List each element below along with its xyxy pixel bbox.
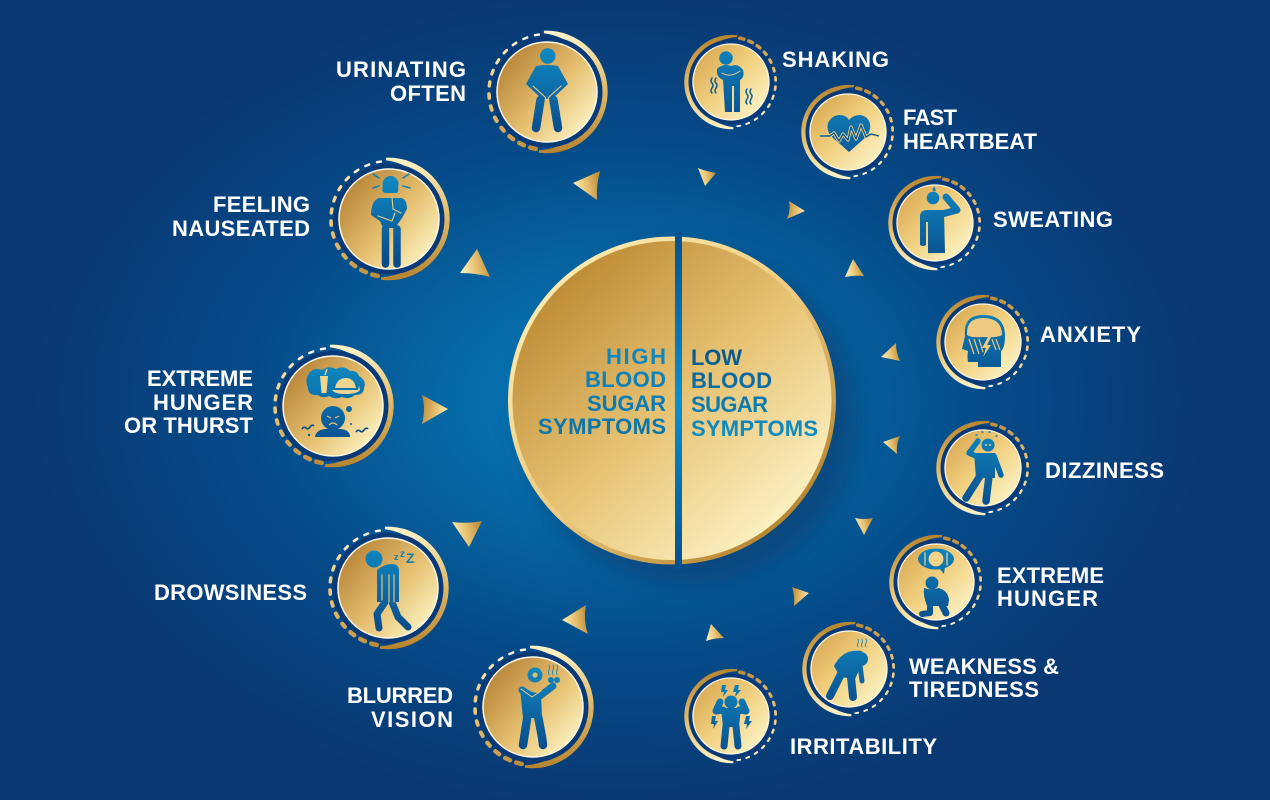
heading: low blood sugar symptoms: LOW — [691, 345, 742, 370]
badge: blurred vision — [475, 647, 592, 767]
label: blurred vision — [347, 683, 453, 732]
heading: high blood sugar symptoms: SYMPTOMS — [538, 414, 666, 439]
badge: shaking — [685, 36, 776, 128]
icon: head with storm — [962, 315, 1005, 367]
arrows: low blood sugar side — [698, 168, 900, 641]
badge: anxiety — [937, 296, 1028, 388]
label: urinating often — [336, 57, 466, 106]
icon: drowsy person — [366, 549, 415, 628]
badge: feeling nauseated — [331, 159, 448, 279]
icon: drowsy person: z — [400, 549, 405, 560]
label: fast heartbeat: FAST — [903, 105, 958, 130]
label: irritability: IRRITABILITY — [790, 734, 937, 759]
label: extreme hunger — [997, 563, 1104, 611]
label: fast heartbeat — [903, 105, 1038, 154]
label: blurred vision: BLURRED — [347, 683, 453, 708]
label: dizziness: DIZZINESS — [1045, 458, 1164, 483]
label: extreme hunger or thurst: HUNGER — [153, 390, 253, 415]
label: blurred vision: VISION — [371, 707, 453, 732]
label: extreme hunger or thurst: EXTREME — [147, 366, 253, 391]
label: extreme hunger or thurst — [124, 366, 254, 438]
label: sweating: SWEATING — [993, 207, 1113, 232]
badge: drowsiness — [330, 528, 447, 648]
icon: nauseated person — [371, 174, 410, 264]
heading: low blood sugar symptoms: SUGAR — [691, 392, 768, 417]
arrows: high blood sugar side — [422, 171, 600, 634]
icon: dizzy person — [966, 432, 1001, 501]
label: feeling nauseated — [172, 192, 310, 241]
label: weakness and tiredness: WEAKNESS & — [909, 654, 1059, 679]
icon: bent-over tired person — [830, 639, 868, 697]
icon: kneeling person thinking of plate — [918, 548, 954, 614]
icon: shaking person — [711, 51, 752, 112]
label: weakness and tiredness — [909, 654, 1059, 702]
icon: heart with ECG line — [820, 115, 879, 152]
badge: urinating often — [489, 32, 606, 152]
badge: extreme hunger or thirst — [275, 346, 392, 466]
label: feeling nauseated: FEELING — [213, 192, 310, 217]
label: fast heartbeat: HEARTBEAT — [903, 129, 1038, 154]
heading: high blood sugar symptoms: SUGAR — [587, 391, 666, 416]
label: extreme hunger: EXTREME — [997, 563, 1104, 588]
central circle: high and low blood sugar — [508, 232, 856, 584]
label: urinating often: OFTEN — [390, 81, 466, 106]
heading: high blood sugar symptoms: HIGH — [606, 344, 666, 369]
label: extreme hunger or thurst: OR THURST — [124, 413, 254, 438]
heading: low blood sugar symptoms: SYMPTOMS — [691, 416, 818, 441]
heading: low blood sugar symptoms: BLOOD — [691, 368, 772, 393]
icon: drowsy person: z — [394, 552, 399, 562]
label: extreme hunger: HUNGER — [997, 586, 1098, 611]
icon: drowsy person: Z — [406, 550, 415, 566]
badge: extreme hunger — [890, 536, 981, 628]
icon: person with blurred vision — [520, 665, 560, 745]
label: urinating often: URINATING — [336, 57, 466, 82]
badge: irritability — [685, 670, 776, 762]
label: drowsiness: DROWSINESS — [154, 580, 307, 605]
label: weakness and tiredness: TIREDNESS — [909, 677, 1039, 702]
icon: person holding groin — [526, 48, 568, 128]
label: anxiety: ANXIETY — [1040, 322, 1141, 347]
icon: irritable flexing person — [711, 685, 752, 746]
badge: weakness and tiredness — [803, 623, 894, 715]
heading: low blood sugar symptoms — [691, 345, 818, 441]
label: feeling nauseated: NAUSEATED — [172, 216, 310, 241]
icon: sweating person — [920, 186, 957, 253]
icon: hungry person thinking of food — [302, 367, 368, 437]
badge: dizziness — [937, 422, 1028, 514]
heading: high blood sugar symptoms — [538, 344, 666, 439]
badge: fast heartbeat — [802, 86, 893, 178]
heading: high blood sugar symptoms: BLOOD — [585, 367, 666, 392]
label: shaking: SHAKING — [782, 47, 889, 72]
badge: sweating — [889, 177, 980, 269]
